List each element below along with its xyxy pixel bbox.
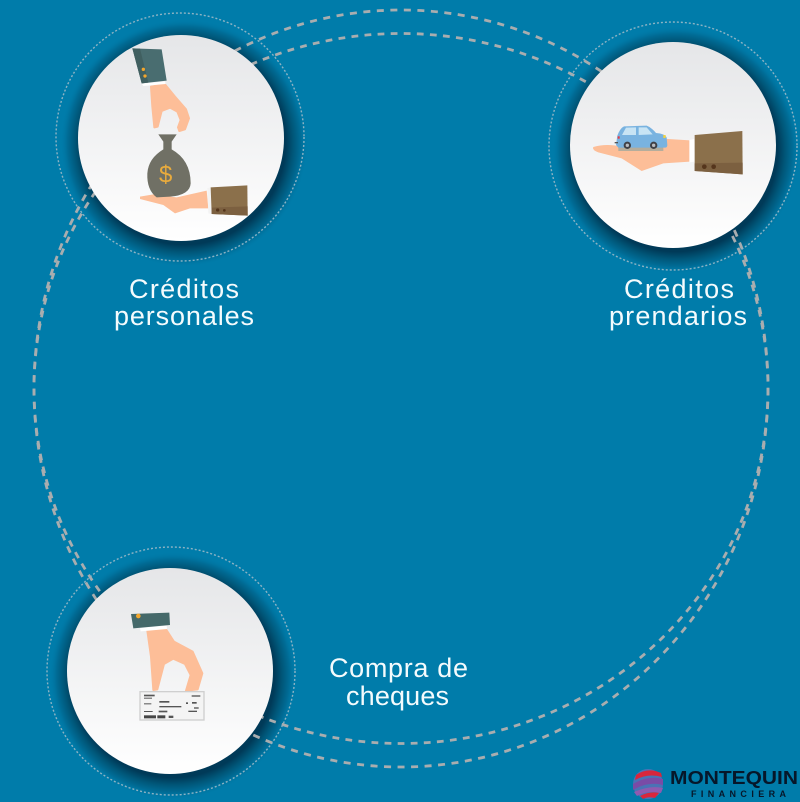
white disc <box>67 568 273 774</box>
panel: compra de cheques <box>47 547 468 795</box>
label: Créditos personales <box>114 274 254 331</box>
icon: globe <box>633 769 663 799</box>
label: Créditos prendarios <box>609 274 747 331</box>
label: Créditos prendarios: Créditos <box>624 274 734 304</box>
tagline: FINANCIERA <box>691 789 786 799</box>
panel: créditos personales <box>56 13 304 331</box>
icon: hand holding car <box>593 126 743 174</box>
label: Compra de cheques <box>329 653 468 711</box>
icon: hands with money bag <box>132 48 248 216</box>
label: Créditos prendarios: prendarios <box>609 301 747 331</box>
logo: Montequin Financiera <box>633 768 798 799</box>
white disc <box>78 35 284 241</box>
dotted ring <box>47 547 295 795</box>
dotted ring <box>549 22 797 270</box>
label: Créditos personales: personales <box>114 301 254 331</box>
icon: hands with money bag: $ <box>159 162 172 189</box>
label: Créditos personales: Créditos <box>129 274 239 304</box>
label: Compra de cheques: cheques <box>346 681 449 711</box>
label: Compra de cheques: Compra de <box>329 653 468 683</box>
panel: créditos prendarios <box>549 22 797 331</box>
icon: hand placing cheque <box>131 613 204 720</box>
white disc <box>570 42 776 248</box>
wordmark: MONTEQUIN <box>670 768 798 788</box>
dotted ring <box>56 13 304 261</box>
